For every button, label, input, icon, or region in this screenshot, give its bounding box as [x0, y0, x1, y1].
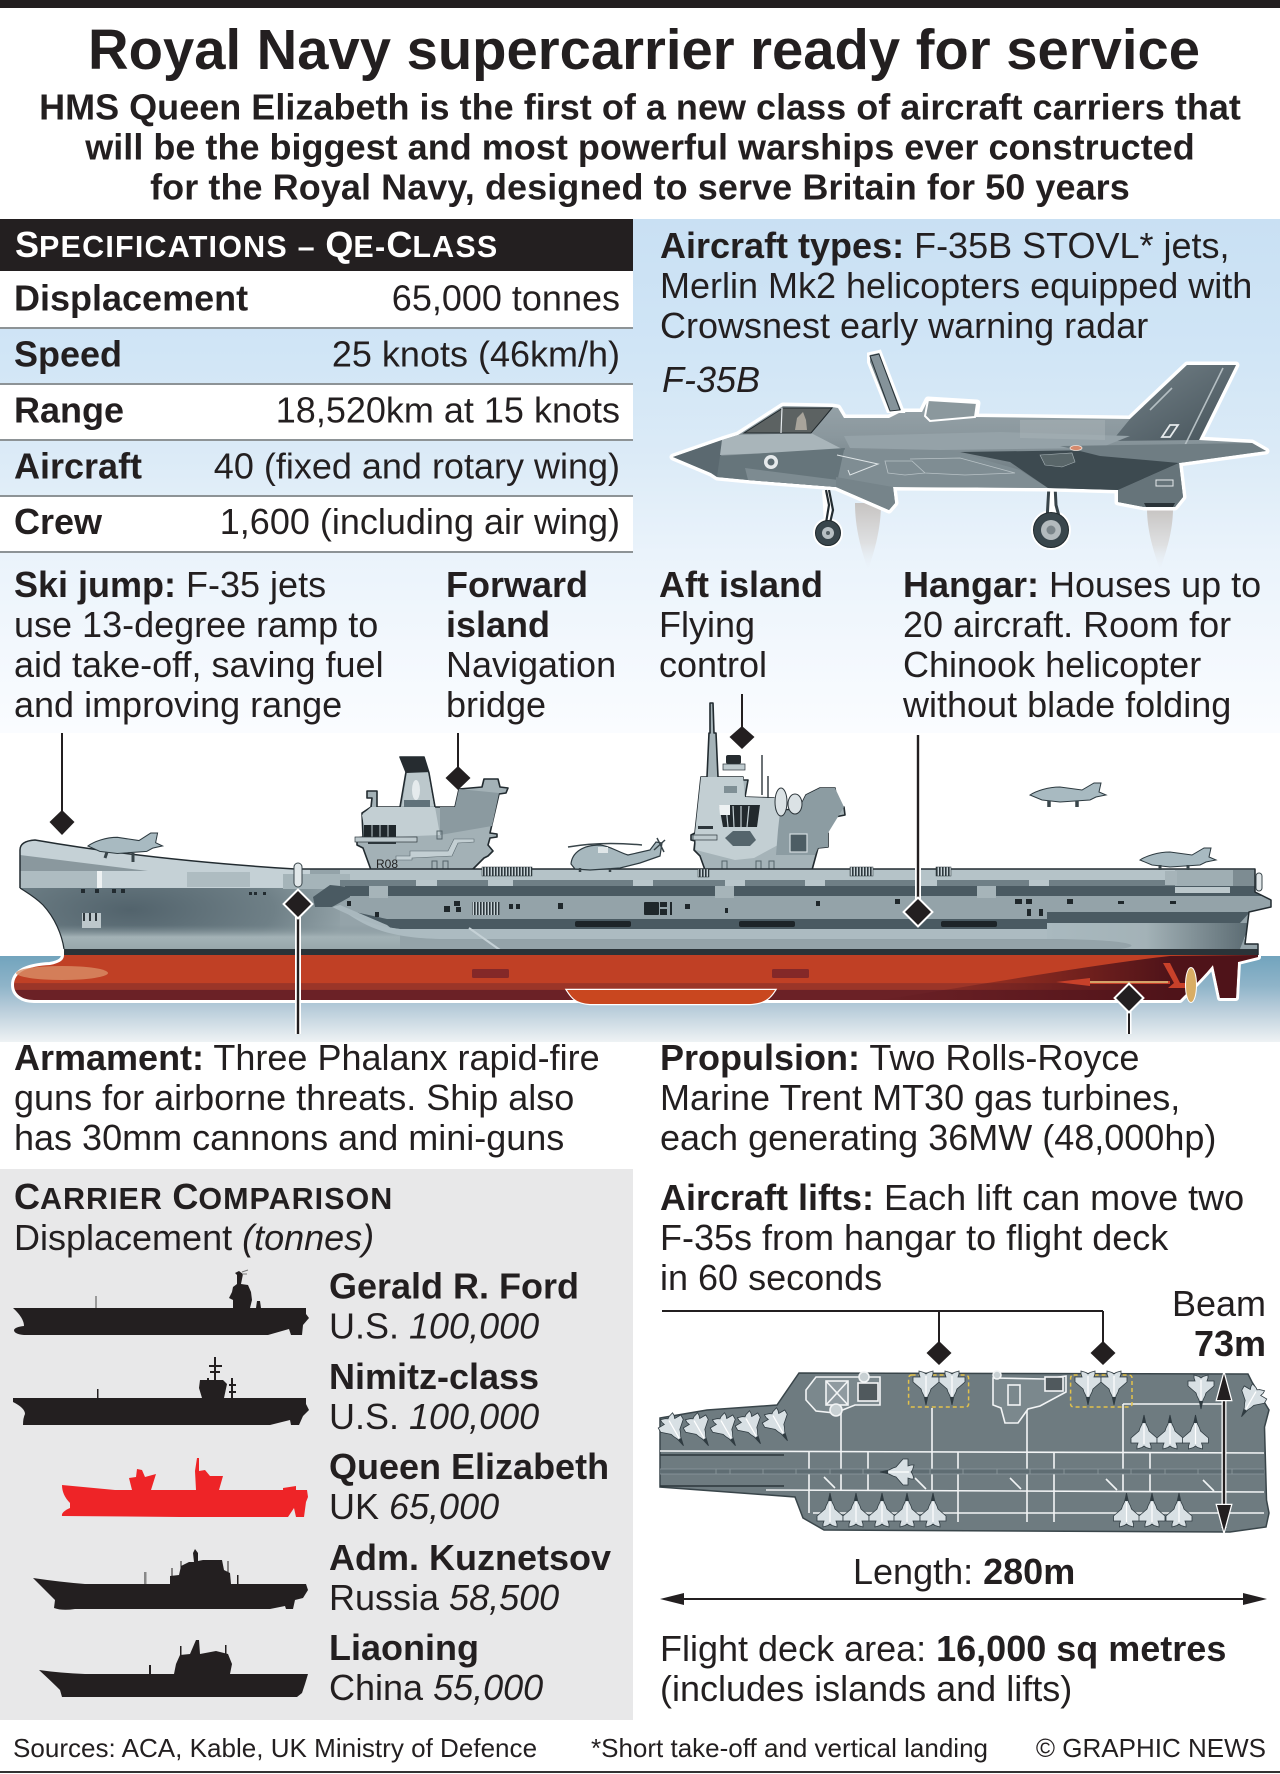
subtitle: HMS Queen Elizabeth is the first of a new class of aircraft carriers that — [39, 86, 1241, 128]
sky background — [0, 219, 1280, 733]
spec row: range: 18,520km at 15 knots — [276, 390, 620, 430]
jet on ski jump — [88, 833, 162, 862]
lower hull bands — [332, 907, 1047, 929]
text: aft island — [659, 564, 823, 685]
jet on aft deck — [1140, 848, 1216, 870]
text: propulsion: Marine Trent MT30 gas turbines, — [660, 1077, 1180, 1118]
label: Liaoning — [329, 1627, 543, 1708]
spec row: speed: Speed — [14, 334, 122, 374]
text: ski jump — [14, 564, 384, 725]
specifications heading: SPECIFICATIONS – QE-CLASS — [15, 224, 498, 265]
forward island — [355, 757, 508, 871]
text: flight deck area — [660, 1628, 1226, 1709]
text: beam — [1172, 1283, 1266, 1364]
label: F-35B: F-35B — [662, 359, 760, 400]
label: Nimitz-class: Nimitz-class — [329, 1356, 539, 1397]
label: Queen Elizabeth — [329, 1446, 609, 1527]
spec row: crew — [0, 497, 633, 553]
comparison heading: Displacement (tonnes) — [14, 1217, 374, 1258]
sonar dome — [567, 990, 775, 1004]
text: aft island: Flying — [659, 604, 755, 645]
parked jets — [655, 1371, 1270, 1527]
spec row: speed: 25 knots (46km/h) — [332, 334, 620, 374]
text: aircraft lifts: in 60 seconds — [660, 1257, 882, 1298]
label: Nimitz-class: U.S. 100,000 — [329, 1396, 539, 1437]
title: Royal Navy supercarrier ready for service — [88, 18, 1200, 81]
silhouette: Liaoning — [39, 1640, 308, 1697]
forward island: R08 — [376, 857, 398, 871]
text: aircraft lifts: F-35s from hangar to flight deck — [660, 1217, 1169, 1258]
helicopter — [568, 838, 665, 872]
text: armament: guns for airborne threats. Ship also — [14, 1077, 574, 1118]
subtitle: will be the biggest and most powerful warships ever constructed — [84, 126, 1195, 168]
leader: hangar — [905, 735, 931, 925]
label: Liaoning: Liaoning — [329, 1627, 479, 1668]
label: Queen Elizabeth: UK 65,000 — [329, 1486, 499, 1527]
panel: carrier comparison — [0, 1169, 633, 1720]
text: aft island: Aft island — [659, 564, 823, 605]
text: armament: has 30mm cannons and mini-guns — [14, 1117, 564, 1158]
flight deck plan — [655, 1371, 1270, 1532]
leader: aft island — [730, 694, 754, 749]
label: Gerald R. Ford: U.S. 100,000 — [329, 1306, 539, 1346]
text: ski jump: aid take-off, saving fuel — [14, 644, 384, 685]
spec row: crew: 1,600 (including air wing) — [220, 501, 620, 542]
text: hangar: without blade folding — [902, 684, 1231, 725]
text: propulsion: each generating 36MW (48,000hp) — [660, 1117, 1216, 1158]
flying jet — [1030, 783, 1106, 807]
comparison heading: CARRIER COMPARISON — [14, 1176, 393, 1217]
label: Queen Elizabeth: Queen Elizabeth — [329, 1446, 609, 1487]
panel: specifications — [0, 219, 633, 553]
illustration: HMS Queen Elizabeth side view — [0, 703, 1280, 1004]
text: forward island: bridge — [446, 684, 546, 725]
label: Adm. Kuznetsov: Adm. Kuznetsov — [329, 1537, 611, 1578]
leader: forward island — [446, 733, 470, 790]
spec row: aircraft: 40 (fixed and rotary wing) — [214, 446, 620, 486]
text: aft island: control — [659, 644, 767, 685]
text: hangar: Hangar: Houses up to — [903, 564, 1261, 605]
label: Adm. Kuznetsov — [329, 1537, 611, 1618]
water background — [0, 956, 1280, 1042]
label: Gerald R. Ford: Gerald R. Ford — [329, 1266, 579, 1306]
leader: propulsion — [1116, 985, 1142, 1034]
text: forward island — [446, 564, 616, 725]
text: forward island: island — [446, 604, 550, 645]
label: Gerald R. Ford — [329, 1266, 579, 1346]
silhouette: Nimitz-class — [13, 1357, 309, 1425]
hull windows — [347, 899, 1176, 917]
lift outlines — [909, 1375, 1132, 1407]
footer: *Short take-off and vertical landing — [591, 1733, 988, 1763]
label: Nimitz-class — [329, 1356, 539, 1437]
text: length: Length: 280m — [853, 1551, 1075, 1592]
text: beam: 73m — [1194, 1323, 1266, 1364]
top bar — [0, 0, 1280, 8]
hangar openings — [575, 921, 997, 927]
text: forward island: Navigation — [446, 644, 616, 685]
label: Adm. Kuznetsov: Russia 58,500 — [329, 1577, 559, 1618]
spec row: range: Range — [14, 390, 124, 430]
spec row: aircraft — [0, 446, 633, 497]
silhouette: Gerald R. Ford — [13, 1270, 309, 1335]
text: flight deck area: Flight deck area: 16,000 sq metres — [660, 1628, 1226, 1669]
beam arrow — [1217, 1374, 1231, 1531]
dark hangar band — [345, 886, 1265, 896]
text: propulsion: Propulsion: Two Rolls-Royce — [660, 1037, 1139, 1078]
aft island — [691, 703, 845, 870]
label: Liaoning: China 55,000 — [329, 1667, 543, 1708]
text: ski jump: and improving range — [14, 684, 342, 725]
grey upper hull — [0, 838, 1280, 955]
subtitle — [39, 86, 1241, 208]
text: aircraft types: Merlin Mk2 helicopters equipped with — [660, 265, 1252, 306]
text: hangar: Chinook helicopter — [903, 644, 1201, 685]
spec row: displacement: Displacement — [14, 278, 248, 318]
footer: Sources: ACA, Kable, UK Ministry of Defence — [13, 1733, 537, 1763]
comparison heading — [14, 1176, 393, 1258]
specifications heading — [0, 219, 633, 271]
text: ski jump: Ski jump: F-35 jets — [14, 564, 326, 605]
text: aircraft types: Crowsnest early warning radar — [660, 305, 1148, 346]
text: ski jump: use 13-degree ramp to — [14, 604, 378, 645]
subtitle: for the Royal Navy, designed to serve Britain for 50 years — [150, 166, 1130, 208]
lift leader bracket — [662, 1311, 1116, 1365]
text: hangar — [902, 564, 1261, 725]
silhouette: Queen Elizabeth — [62, 1458, 308, 1517]
spec row: displacement — [0, 271, 633, 329]
text: propulsion — [660, 1037, 1216, 1158]
propeller and shaft — [1056, 963, 1196, 1002]
spec row: range — [0, 385, 633, 441]
leader: armament — [285, 891, 311, 1034]
spec row: displacement: 65,000 tonnes — [392, 278, 620, 318]
text: armament — [14, 1037, 600, 1158]
deck equipment grilles — [482, 867, 951, 877]
phalanx guns — [294, 863, 1262, 891]
text: forward island: Forward — [446, 564, 588, 605]
spec row: crew: Crew — [14, 501, 103, 542]
footer — [0, 1733, 1280, 1773]
text: aircraft types — [660, 225, 1252, 346]
text: armament: Armament: Three Phalanx rapid-fire — [14, 1037, 600, 1078]
spec row: speed — [0, 334, 633, 385]
text: flight deck area: (includes islands and lifts) — [660, 1668, 1072, 1709]
text: aircraft lifts — [660, 1177, 1244, 1298]
text: beam: Beam — [1172, 1283, 1266, 1324]
hull vents — [472, 969, 809, 978]
footer: © GRAPHIC NEWS — [1036, 1733, 1266, 1763]
deck markings — [660, 1404, 1264, 1522]
flight deck band — [340, 870, 1254, 880]
spec row: aircraft: Aircraft — [14, 446, 142, 486]
leader: ski jump — [50, 733, 74, 835]
illustration: F-35B jet — [673, 353, 1266, 570]
red underwater hull — [14, 955, 1258, 1000]
silhouette: Adm. Kuznetsov — [33, 1549, 308, 1610]
text: aircraft types: Aircraft types: F-35B STOVL* jets, — [660, 225, 1230, 266]
forward island plan — [806, 1372, 880, 1416]
aft island plan — [993, 1371, 1066, 1423]
length arrow — [660, 1593, 1267, 1605]
text: hangar: 20 aircraft. Room for — [903, 604, 1231, 645]
text: aircraft lifts: Aircraft lifts: Each lift can move two — [660, 1177, 1244, 1218]
